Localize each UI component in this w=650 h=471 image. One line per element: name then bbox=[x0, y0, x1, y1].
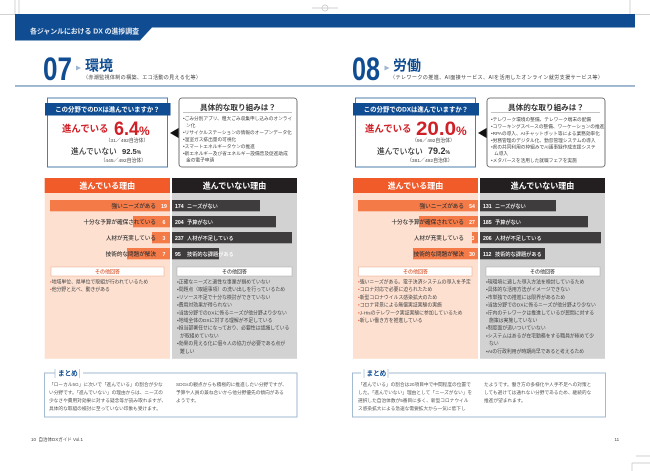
other answers: progressing: その他回答 bbox=[403, 268, 428, 276]
bar chart: not progressing reasons: 112 bbox=[483, 252, 491, 258]
other answers: not progressing: ▪当該分野でのDXに係るニーズが他分野より少ない bbox=[177, 309, 287, 316]
bar chart: not progressing reasons: 131 bbox=[483, 204, 492, 210]
bar chart: not progressing reasons: 204 bbox=[175, 220, 184, 226]
bar chart: progressing reasons: 強いニーズがある bbox=[420, 202, 464, 210]
bar chart: not progressing reasons: 185 bbox=[483, 220, 492, 226]
progress result box: 進んでいる bbox=[62, 123, 108, 134]
other answers: not progressing: ▪具体的な活用方法がイメージできない bbox=[486, 286, 570, 293]
summary box bbox=[352, 368, 606, 417]
initiatives box: 具体的な取り組みは？ bbox=[200, 102, 276, 112]
header band bbox=[15, 14, 635, 40]
progress result box: （445／492自治体） bbox=[100, 157, 146, 164]
other answers: not progressing bbox=[486, 267, 600, 355]
other answers: not progressing: ▪リソース不足で十分な検討ができていない bbox=[177, 294, 271, 301]
arrow bbox=[170, 128, 178, 138]
bar chart: not progressing reasons: 人材が不足している bbox=[187, 234, 234, 242]
summary box bbox=[44, 368, 297, 417]
other answers: not progressing: ▪費用対効果が得られない bbox=[177, 302, 232, 309]
other answers: not progressing: ▪当該分野でのDXに係るニーズが他分野より少ない bbox=[486, 302, 596, 309]
other answers: not progressing: 難しい bbox=[180, 348, 195, 355]
reasons panel: not progressing: 進んでいない理由 bbox=[203, 180, 266, 190]
other answers: not progressing: ない bbox=[489, 340, 499, 347]
progress result box: （31／492自治体） bbox=[106, 137, 148, 144]
bar chart: not progressing reasons: 206 bbox=[483, 236, 492, 242]
summary box: ようです。 bbox=[176, 397, 199, 404]
reasons panel: progressing bbox=[45, 178, 170, 359]
bar chart: not progressing reasons: 174 bbox=[175, 204, 184, 210]
initiatives box bbox=[179, 98, 297, 167]
section heading: 各ジャンルにおける DX の進捗調査 bbox=[30, 27, 139, 36]
initiatives box: 具体的な取り組みは？ bbox=[508, 102, 584, 112]
summary box: しても避けては通れない分野であるため、継続的な bbox=[484, 389, 592, 396]
reasons panel: not progressing bbox=[172, 178, 297, 359]
other answers: not progressing: ▪市単独での推進には限界があるため bbox=[486, 294, 565, 301]
other answers: not progressing: ▪システムはあるが在宅勤務をする職員が極めて少 bbox=[486, 332, 594, 339]
initiatives box: ン化 bbox=[186, 122, 196, 129]
bar chart: not progressing reasons: 人材が不足している bbox=[495, 234, 542, 242]
other answers: not progressing: その他回答 bbox=[222, 268, 247, 276]
reasons panel: not progressing: 進んでいない理由 bbox=[511, 180, 574, 190]
progress result box: （381／492自治体） bbox=[407, 157, 453, 164]
other answers: not progressing bbox=[177, 267, 292, 355]
progress result box: 進んでいる bbox=[365, 123, 411, 134]
summary box: たようです。働き方の多様化や人手不足への対策と bbox=[484, 381, 591, 388]
page 10: environment bbox=[31, 51, 297, 443]
other answers: not progressing: ▪効果の見える化に個々人の協力が必要である点が bbox=[177, 340, 285, 347]
other answers: progressing: •新型コロナウイルス感染拡大のため bbox=[358, 294, 437, 301]
initiatives box: •リサイクルステーションの情報のオープンデータ化 bbox=[183, 129, 292, 136]
summary box: した。「進んでいない」理由として「ニーズがない」を bbox=[358, 389, 473, 396]
bar chart: not progressing reasons: 237 bbox=[175, 236, 184, 242]
progress result box: 6.4 bbox=[114, 118, 139, 140]
other answers: progressing: •他分野と比べ、動きがある bbox=[50, 286, 110, 293]
initiatives box: •ごみ分別アプリ、粗大ごみ収集申し込みのオンライ bbox=[183, 115, 292, 122]
section title 07: （赤潮監視体制の構築、エコ活動の見える化等） bbox=[83, 74, 201, 81]
initiatives box: •新エネルギー及び省エネルギー設備普及促進助成 bbox=[183, 150, 288, 157]
initiatives box: •温室ガス排出量の可視化 bbox=[183, 136, 237, 143]
reasons panel: progressing: 進んでいる理由 bbox=[79, 180, 135, 190]
other answers: progressing: •J-Hisのテレワーク実証実験に参加しているため bbox=[358, 309, 463, 316]
bar chart: progressing reasons: 3 bbox=[163, 236, 166, 242]
other answers: not progressing: ▪問題点（取組事項）の洗い出しを行っているため bbox=[177, 286, 285, 293]
summary box: 「ローカル5G」に次いで「進んでいる」の割合が少な bbox=[49, 381, 163, 388]
section title 07: 環境 bbox=[85, 58, 113, 74]
bar chart: progressing reasons bbox=[50, 200, 170, 259]
progress result box: この分野でのDXは進んでいますか？ bbox=[55, 104, 160, 114]
bar chart: progressing reasons: 30 bbox=[469, 252, 475, 258]
reasons panel: progressing bbox=[353, 178, 478, 359]
bar chart: progressing reasons: 7 bbox=[163, 252, 166, 258]
bar chart: not progressing reasons: 95 bbox=[175, 252, 181, 258]
progress result box: この分野でのDXは進んでいますか？ bbox=[364, 104, 468, 114]
bar chart: progressing reasons bbox=[358, 200, 478, 259]
bar chart: not progressing reasons: ニーズがない bbox=[495, 202, 526, 210]
progress result box bbox=[353, 98, 479, 167]
summary box: い分野です。「進んでいない」の理由からは、ニーズの bbox=[49, 389, 163, 396]
footer: page 11: 11 bbox=[614, 437, 620, 442]
bar chart: not progressing reasons: 予算がない bbox=[495, 218, 521, 226]
footer: page 10: 10 自治体DXガイド Vol.1 bbox=[31, 436, 84, 443]
other answers: not progressing: ▪庁内のテレワークは推進しているが民間に対する bbox=[486, 309, 594, 316]
initiatives box: •テレワーク環境の整備、テレワーク端末の配備 bbox=[491, 116, 591, 123]
section title 08: 08 bbox=[352, 51, 380, 87]
initiatives box: 金の電子申請 bbox=[186, 156, 214, 164]
reasons panel: not progressing bbox=[480, 178, 605, 359]
bar chart: progressing reasons: 19 bbox=[161, 204, 167, 210]
bar chart: not progressing reasons: 予算がない bbox=[187, 218, 213, 226]
summary box: まとめ bbox=[366, 370, 387, 378]
other answers: progressing: •強いニーズがある。電子決済システムの導入を予定 bbox=[358, 278, 471, 286]
other answers: not progressing: ▪担当部署任せになっており、必要性は認識している bbox=[177, 325, 290, 332]
progress result box: % bbox=[456, 124, 467, 138]
initiatives box: •メタバースを活用した就職フェアを実施 bbox=[491, 157, 577, 164]
other answers: not progressing: その他回答 bbox=[530, 268, 555, 276]
section title 08: （テレワークの推進、AI面接サービス、AIを活用したオンライン就労支援サービス等） bbox=[390, 74, 603, 81]
bar chart: progressing reasons: 十分な予算が確保されている bbox=[83, 218, 156, 226]
progress result box: 進んでいない bbox=[71, 146, 117, 156]
initiatives box: •RPAの導入、AIチャットボット等による業務効率化 bbox=[491, 130, 600, 137]
bar chart: progressing reasons: 54 bbox=[469, 204, 475, 210]
summary box: SDGsの観点からも積極的に推進したい分野ですが、 bbox=[176, 381, 287, 388]
other answers: progressing: •地域単位、県単位で取組が行われているため bbox=[50, 278, 148, 286]
reasons panel: progressing: 進んでいる理由 bbox=[388, 180, 443, 190]
initiatives box: ム導入 bbox=[494, 150, 508, 157]
summary box: 選択した自治体数が5番目に多く、新型コロナウイル bbox=[358, 397, 469, 404]
summary box: 「進んでいる」の割合は20項目中で中間程度の位置で bbox=[358, 381, 471, 388]
other answers: progressing: •コロナ対応で必要に迫られたため bbox=[358, 286, 433, 293]
other answers: progressing: •新しい働き方を推進している bbox=[358, 317, 423, 324]
other answers: progressing: その他回答 bbox=[95, 268, 120, 276]
progress result box: 79.2% bbox=[428, 146, 451, 156]
other answers: progressing bbox=[50, 267, 164, 293]
bar chart: progressing reasons: 技術的な問題が解決 bbox=[106, 250, 156, 258]
progress result box: 進んでいない bbox=[377, 146, 423, 156]
other answers: not progressing: ▪地域全体のDXに対する理解が不足している bbox=[177, 317, 273, 324]
bar chart: not progressing reasons bbox=[480, 200, 601, 259]
progress result box: % bbox=[139, 124, 150, 138]
other answers: not progressing: ▪AIの行政利用が時期尚早であると考えるため bbox=[486, 348, 584, 355]
summary box: 少なさや費用対効果に対する疑念等が読み取れますが、 bbox=[49, 397, 166, 404]
bar chart: progressing reasons: 3 bbox=[472, 236, 475, 242]
other answers: progressing: •コロナ背景による無償実証実験の実施 bbox=[358, 302, 442, 309]
section title 07: 07 bbox=[43, 51, 72, 87]
section title 07 bbox=[43, 51, 201, 87]
progress result box: 92.5% bbox=[122, 147, 142, 156]
initiatives box: •県の共同利用の枠組みでAI議事録作成支援システ bbox=[491, 143, 596, 150]
progress result box: （96／492自治体） bbox=[412, 137, 455, 144]
bar chart: progressing reasons: 強いニーズがある bbox=[112, 202, 156, 210]
bar chart: progressing reasons: 十分な予算が確保されている bbox=[391, 218, 464, 226]
arrow bbox=[478, 128, 486, 138]
bar chart: not progressing reasons: 技術的な課題がある bbox=[187, 250, 234, 258]
summary box: ス感染拡大による急速な需要拡大から一気に低下し bbox=[358, 405, 466, 412]
summary box: 具体的な取組の検討に至っていない印象も受けます。 bbox=[49, 405, 161, 412]
page 11: labor bbox=[352, 51, 620, 442]
other answers: progressing bbox=[358, 267, 472, 324]
initiatives box: •コワーキングスペースの整備、ワーケーションの推進 bbox=[491, 123, 605, 130]
other answers: not progressing: ▪正確なニーズと適性な事業が掴めていない bbox=[177, 278, 271, 286]
summary box: 予算や人員の兼ね合いから他分野優先の傾向がある bbox=[176, 389, 284, 396]
section title 08: 労働 bbox=[393, 58, 421, 74]
divider line bbox=[15, 85, 635, 87]
bar chart: not progressing reasons bbox=[172, 200, 292, 259]
initiatives box: •スマートエネルギータウンの推進 bbox=[183, 143, 255, 150]
summary box: まとめ bbox=[58, 370, 78, 378]
initiatives box: •労務管理のデジタル化、勤怠管理システムの導入 bbox=[491, 137, 596, 144]
progress result box bbox=[45, 98, 170, 167]
bar chart: progressing reasons: 人材が充実している bbox=[414, 234, 464, 242]
summary box: 推進が望まれます。 bbox=[484, 397, 526, 404]
other answers: not progressing: 施策は実施していない bbox=[489, 317, 537, 324]
other answers: not progressing: が取組めていない bbox=[180, 332, 219, 339]
bar chart: progressing reasons: 技術的な問題が解決 bbox=[414, 250, 464, 258]
section title 08 bbox=[352, 51, 603, 87]
bar chart: progressing reasons: 人材が充実している bbox=[106, 234, 156, 242]
progress result box: 20.0 bbox=[416, 118, 456, 140]
other answers: not progressing: ▪現環境に適した導入方法を検討しているため bbox=[486, 278, 585, 286]
bar chart: progressing reasons: 27 bbox=[469, 220, 475, 226]
other answers: not progressing: ▪制度面が追いついていない bbox=[486, 325, 546, 332]
bar chart: not progressing reasons: ニーズがない bbox=[187, 202, 218, 210]
initiatives box bbox=[487, 98, 605, 167]
bar chart: progressing reasons: 6 bbox=[163, 220, 166, 226]
bar chart: not progressing reasons: 技術的な課題がある bbox=[495, 250, 542, 258]
